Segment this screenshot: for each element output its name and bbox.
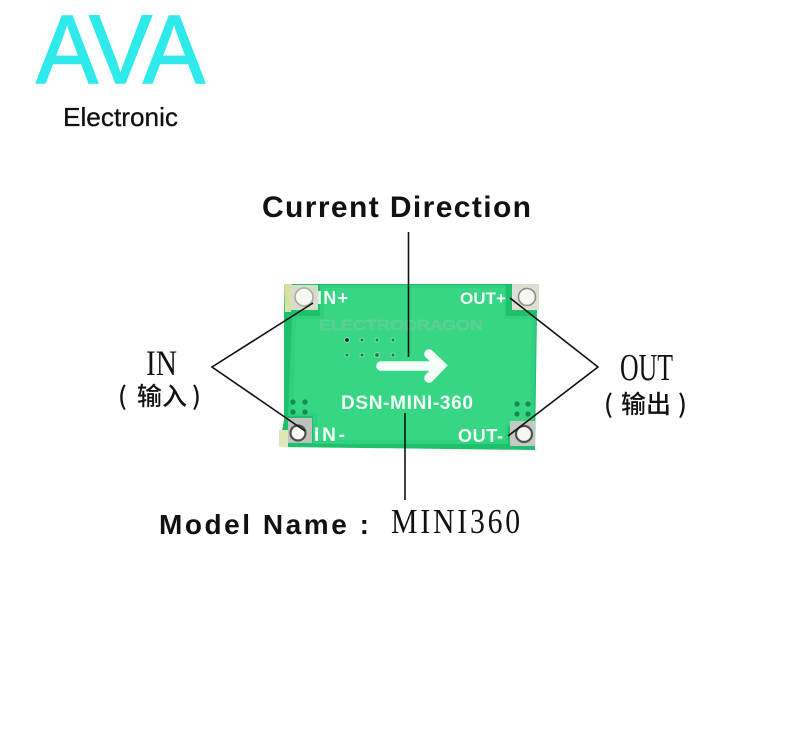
silkscreen: OUT-: OUT- bbox=[458, 426, 503, 446]
label: model name: Model Name : bbox=[159, 509, 369, 540]
silkscreen: IN+: IN+ bbox=[317, 288, 348, 308]
label: IN: IN bbox=[146, 343, 177, 383]
vias bottom right bbox=[514, 401, 531, 417]
label: IN bbox=[118, 343, 201, 413]
label: IN Chinese: ( bbox=[118, 377, 127, 413]
corner pad bottom right bbox=[510, 421, 535, 446]
label: OUT Chinese: 输出 bbox=[621, 385, 671, 421]
via holes bbox=[345, 338, 395, 357]
label: OUT: OUT bbox=[620, 347, 673, 389]
pointer lines: IN bbox=[212, 303, 313, 431]
silkscreen: OUT+: OUT+ bbox=[460, 289, 506, 308]
label: IN Chinese: ) bbox=[192, 377, 201, 413]
model name value: MINI360 bbox=[391, 503, 523, 542]
label: IN Chinese: 输入 bbox=[137, 377, 187, 413]
corner pad top left bbox=[291, 285, 318, 310]
pointer lines: current direction bbox=[408, 232, 410, 357]
pointer line: model name bbox=[404, 413, 406, 500]
silkscreen: IN-: IN- bbox=[314, 425, 345, 446]
label: OUT bbox=[604, 347, 687, 421]
corner pad bottom left bbox=[288, 418, 312, 443]
solder mask surface bbox=[288, 285, 536, 444]
board edge strip bbox=[284, 284, 292, 312]
heading: current direction: Current Direction bbox=[262, 191, 531, 224]
label: OUT Chinese: ( bbox=[604, 385, 613, 421]
logo wordmark bbox=[36, 0, 205, 104]
PCB module bbox=[279, 284, 539, 450]
logo: AVA Electronic bbox=[36, 0, 205, 132]
label: OUT Chinese: ) bbox=[678, 385, 687, 421]
corner pad top right bbox=[512, 284, 539, 310]
vias bottom left bbox=[290, 399, 308, 415]
white arrow silkscreen bbox=[381, 354, 441, 378]
silkscreen: model: DSN-MINI-360 bbox=[341, 393, 473, 414]
pointer lines: OUT bbox=[508, 298, 598, 436]
logo subtitle: Electronic bbox=[63, 102, 178, 132]
watermark: ELECTRODRAGON bbox=[319, 317, 483, 334]
label: model name bbox=[159, 503, 523, 542]
board base bbox=[279, 284, 538, 450]
